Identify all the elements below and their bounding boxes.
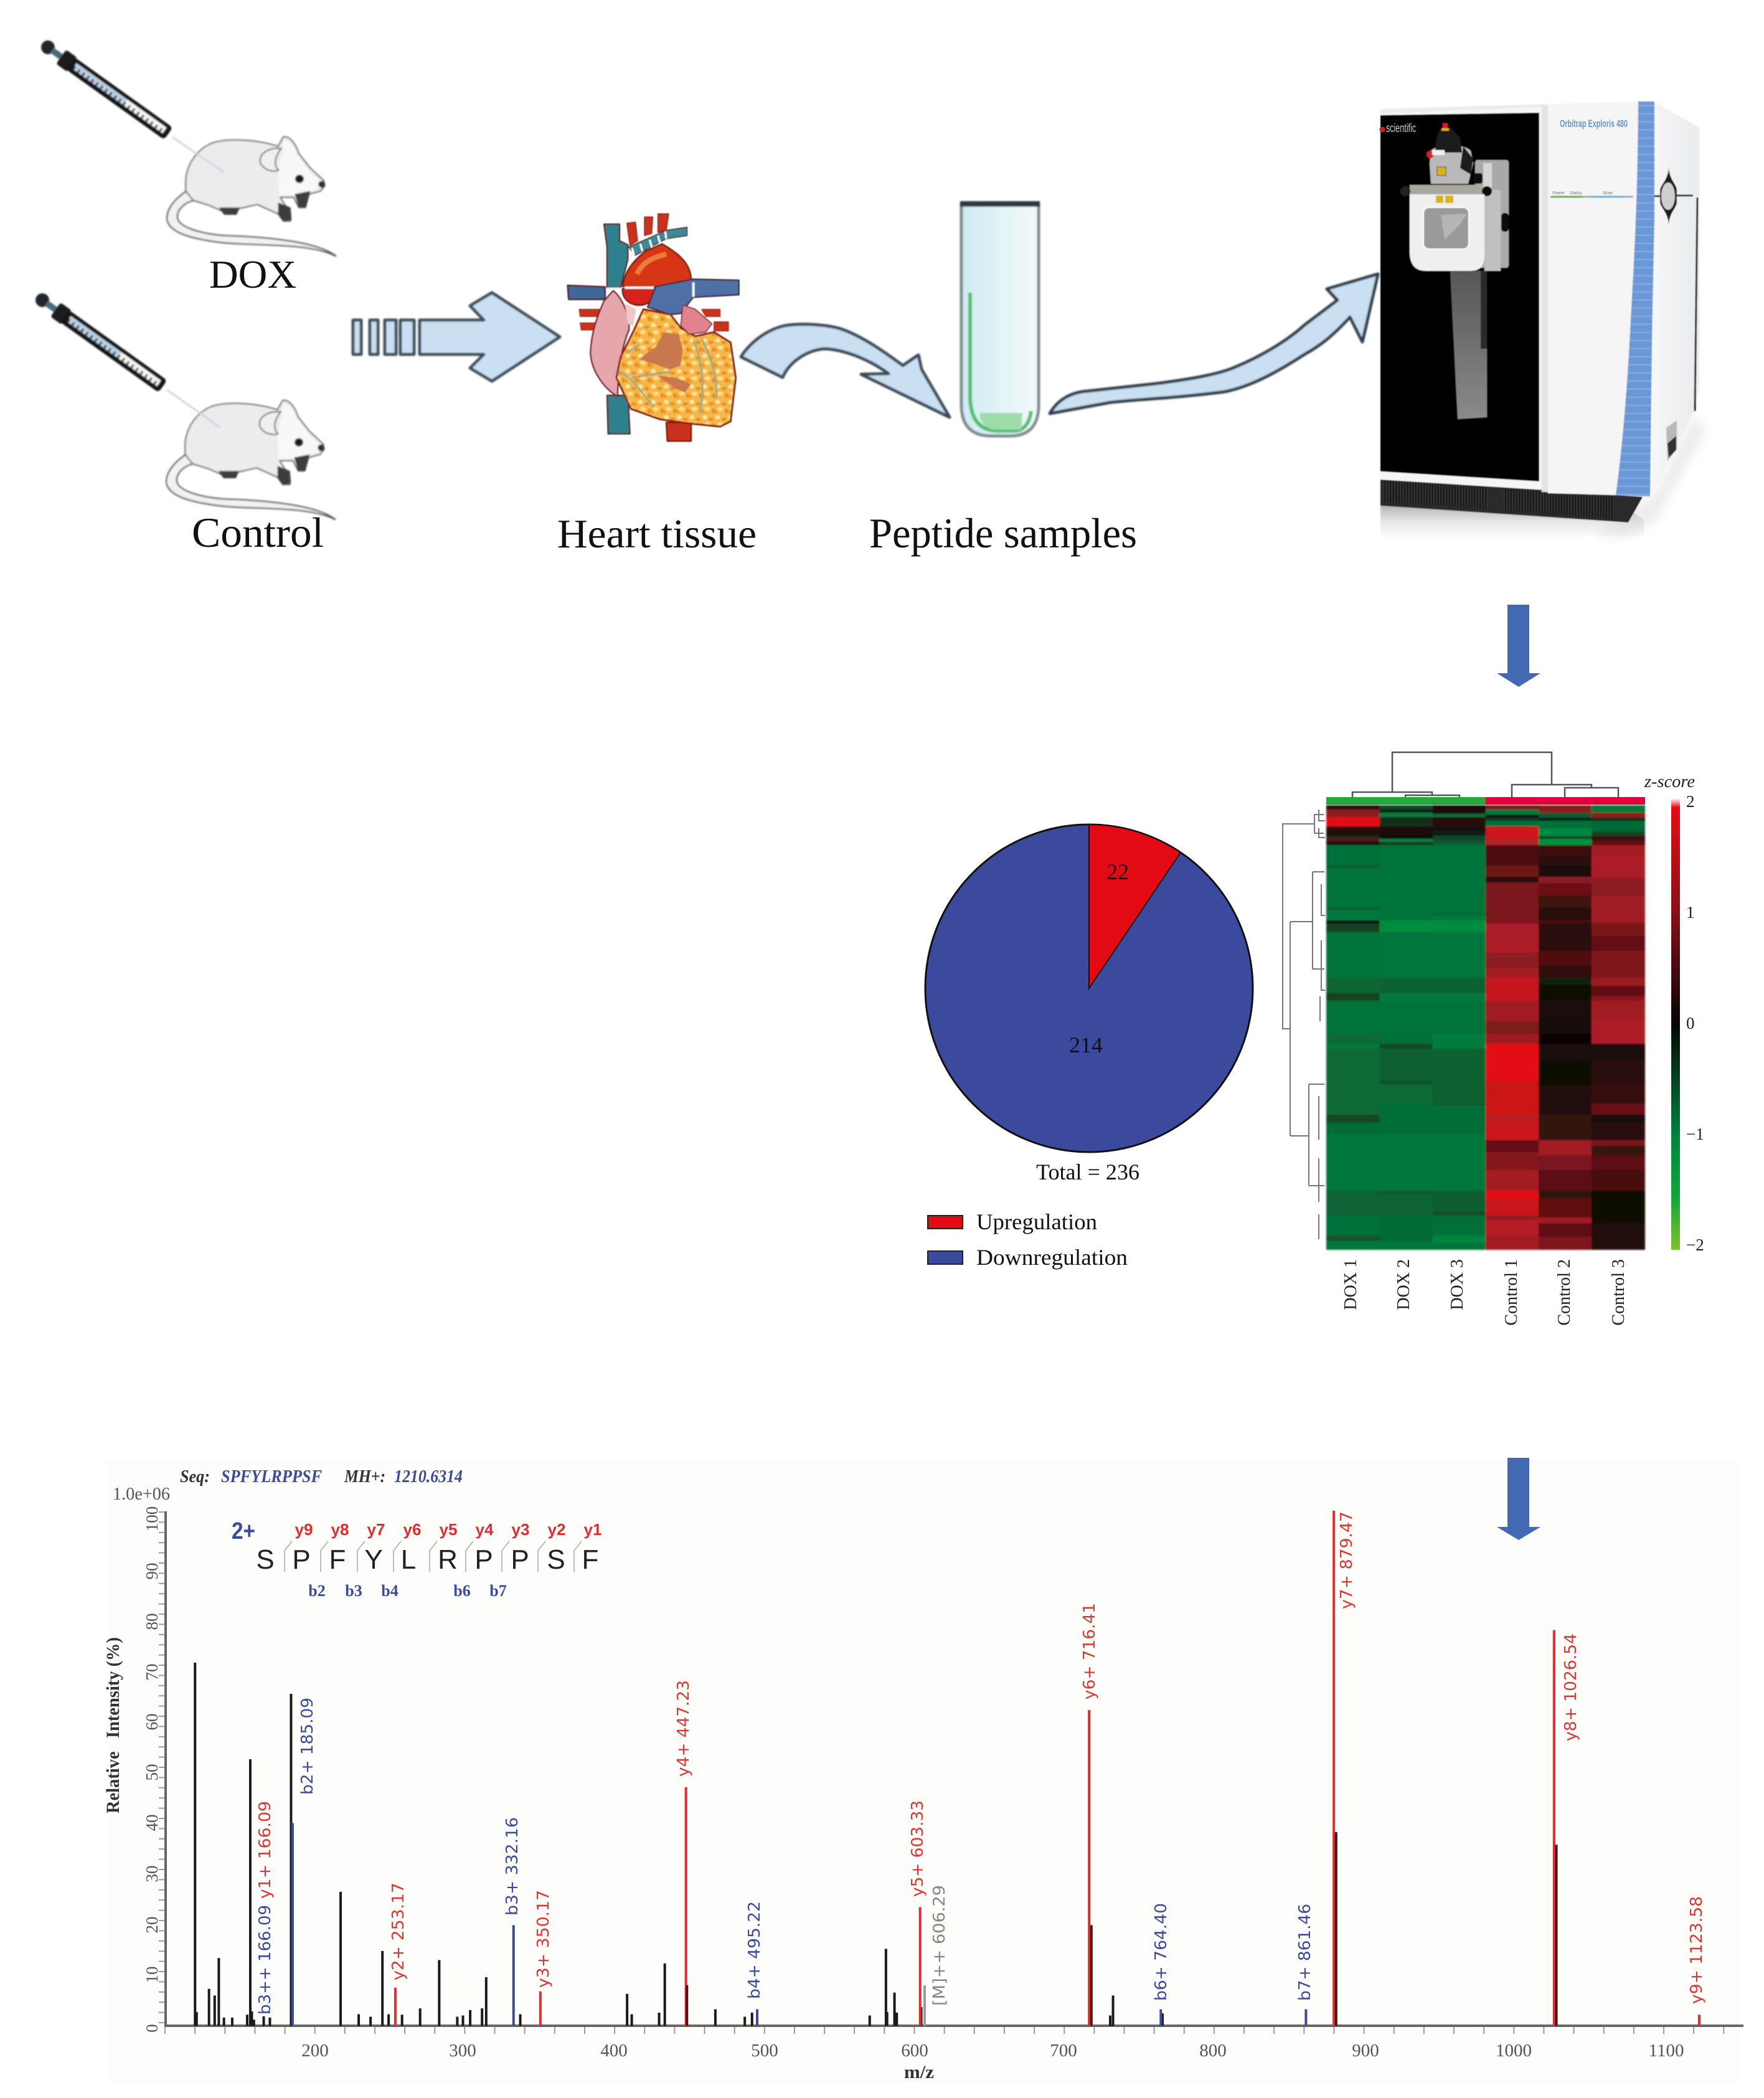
panel: peptide fragment map: R (438, 1544, 458, 1575)
label: DOX: DOX (209, 252, 296, 296)
panel: peptide fragment map: F (582, 1544, 598, 1575)
label: x axis tick values: 800 (1199, 2041, 1227, 2061)
label: b-ion peak annotations: b7+ 861.46 (1296, 1904, 1314, 2001)
label: y axis tick values: 20 (143, 1917, 161, 1933)
label: total: Total = 236 (1036, 1160, 1139, 1184)
arrow: heart to peptide (741, 324, 950, 417)
label: colour bar values: 1 (1686, 903, 1695, 922)
label: x axis tick values: 500 (751, 2041, 778, 2061)
label: x axis tick values: 400 (600, 2041, 628, 2061)
chart: top dendrogram (1352, 752, 1618, 797)
illustration: Orbitrap mass spectrometer: Power (1552, 191, 1565, 196)
chart: red y-ion peaks (395, 1511, 1699, 2026)
label: heatmap sample names: Control 1 (1502, 1259, 1521, 1326)
chart: blue b-ion peaks (293, 1823, 1306, 2026)
chart: heatmap (1326, 805, 1645, 1250)
label: Control: Control (192, 509, 324, 556)
panel: peptide fragment map: P (292, 1544, 311, 1575)
panel: peptide fragment map: L (401, 1544, 416, 1575)
label: sequence header (180, 1467, 463, 1486)
label: heatmap sample names: DOX 2 (1394, 1259, 1413, 1310)
arrow: peptide to mass spectrometer (1050, 274, 1378, 413)
label: x axis title: m/z (904, 2062, 934, 2082)
label: y axis tick values: 40 (143, 1815, 161, 1831)
chart: black unassigned peaks (195, 1663, 870, 2026)
panel: peptide fragment map: y5 (440, 1520, 457, 1539)
illustration: Orbitrap mass spectrometer: Scan (1603, 191, 1613, 196)
panel: peptide fragment map: b2 (308, 1582, 326, 1600)
label: x axis tick values: 600 (901, 2041, 928, 2061)
chart: pie of regulated proteins: 214 (1069, 1032, 1103, 1057)
chart: black unassigned peaks, high mass (886, 1949, 1163, 2026)
label: colour bar values: −2 (1686, 1236, 1704, 1254)
label: x axis tick values: 1000 (1496, 2041, 1532, 2061)
panel: peptide fragment map: b6 (453, 1582, 471, 1600)
panel: peptide fragment map: y3 (512, 1520, 529, 1539)
label: Heart tissue: Heart tissue (557, 511, 757, 557)
legend: upregulation: Upregulation (976, 1209, 1097, 1234)
illustration: Orbitrap mass spectrometer: scientific (1386, 122, 1416, 135)
label: precursor annotation: [M]++ 606.29 (930, 1885, 949, 2006)
label: y-ion peak annotations: y1+ 166.09 (256, 1801, 275, 1899)
label: y axis tick values: 90 (143, 1563, 161, 1579)
arrow: mass spectrometer to results (1497, 605, 1540, 687)
icon: DOX syringe (37, 36, 224, 172)
label: y axis tick values: 30 (143, 1866, 161, 1882)
label: b-ion peak annotations: b3+ 332.16 (503, 1817, 522, 1916)
illustration: heart (568, 214, 739, 441)
panel: peptide fragment map: b7 (489, 1582, 507, 1600)
label: y-ion peak annotations: y7+ 879.47 (1337, 1511, 1356, 1609)
label: x axis tick values: 700 (1050, 2041, 1077, 2061)
label: y-ion peak annotations: y3+ 350.17 (534, 1890, 553, 1988)
illustration: Control mouse (166, 400, 336, 520)
arrow: mice to heart (353, 293, 560, 381)
chart: pie of regulated proteins: 22 (1106, 859, 1129, 884)
label: y-ion peak annotations (256, 1511, 1706, 2004)
panel: peptide fragment map: y8 (331, 1520, 349, 1539)
label: colour bar values: 0 (1686, 1014, 1695, 1032)
illustration: Orbitrap mass spectrometer (1380, 102, 1706, 537)
chart: left dendrogram (1283, 810, 1325, 1239)
label: x axis tick values: 200 (301, 2041, 329, 2061)
label: Peptide samples: Peptide samples (869, 509, 1137, 557)
label: colour bar values: −1 (1686, 1125, 1704, 1143)
icon: Control syringe (32, 289, 220, 427)
label: heatmap sample names: DOX 3 (1448, 1259, 1467, 1310)
panel: peptide fragment map: y2 (548, 1520, 565, 1539)
label: y-ion peak annotations: y6+ 716.41 (1080, 1603, 1099, 1699)
panel: peptide fragment map: P (474, 1544, 493, 1575)
label: y axis tick values: 10 (143, 1967, 161, 1983)
label: z-score title: z-score (1644, 772, 1695, 791)
label: b-ion peak annotations: b6+ 764.40 (1152, 1903, 1171, 2001)
label: heatmap sample names: DOX 1 (1341, 1259, 1361, 1310)
panel: peptide fragment map: b4 (381, 1582, 399, 1600)
illustration: Orbitrap mass spectrometer: Status (1570, 191, 1582, 196)
label: sequence header: MH+: (344, 1467, 385, 1486)
illustration: Orbitrap mass spectrometer: Orbitrap Exploris 480 (1560, 118, 1628, 130)
panel: MS/MS spectrum (103, 1460, 1746, 2083)
chart: z-score colour bar (1671, 798, 1680, 1250)
chart: sample annotation bar (1326, 797, 1645, 805)
label: y-ion peak annotations: y4+ 447.23 (674, 1680, 693, 1777)
label: heatmap sample names: Control 2 (1555, 1259, 1574, 1326)
panel: peptide fragment map: S (256, 1544, 275, 1575)
label: x axis tick values (301, 2041, 1684, 2061)
label: colour bar values: 2 (1686, 792, 1695, 811)
label: intensity scale: 1.0e+06 (113, 1485, 170, 1504)
panel: peptide fragment map: y7 (367, 1520, 385, 1539)
label: b-ion peak annotations (256, 1698, 1314, 2015)
label: y-ion peak annotations: y8+ 1026.54 (1562, 1633, 1580, 1741)
label: y-ion peak annotations: y2+ 253.17 (389, 1883, 408, 1980)
label: b-ion peak annotations: b3++ 166.09 (256, 1905, 275, 2015)
label: x axis tick values: 900 (1352, 2041, 1379, 2061)
panel: peptide fragment map: b3 (345, 1582, 362, 1600)
panel: peptide fragment map: P (511, 1544, 529, 1575)
label: y axis tick values: 50 (143, 1764, 161, 1781)
label: sequence header: Seq: (180, 1467, 210, 1486)
chart: spectrum axes (159, 1511, 1746, 2034)
illustration: test tube (960, 201, 1040, 436)
legend: upregulation (928, 1209, 1097, 1234)
label: y axis tick values: 80 (143, 1613, 161, 1630)
arrow: results to spectrum (1497, 1458, 1540, 1540)
panel: peptide fragment map: Y (364, 1544, 383, 1575)
panel: peptide fragment map: 2+ (232, 1518, 255, 1544)
label: x axis tick values: 1100 (1649, 2041, 1684, 2061)
label: sequence header: 1210.6314 (394, 1467, 463, 1486)
label: y axis tick values: 0 (143, 2024, 161, 2033)
panel: peptide fragment map: y9 (295, 1520, 313, 1539)
label: y-ion peak annotations: y5+ 603.33 (908, 1800, 927, 1897)
panel: peptide fragment map: y1 (584, 1520, 601, 1539)
illustration: DOX mouse (167, 137, 336, 257)
label: y axis tick values: 70 (143, 1664, 161, 1680)
label: y-ion peak annotations: y9+ 1123.58 (1687, 1896, 1706, 2004)
label: x axis tick values: 300 (449, 2041, 476, 2061)
legend: downregulation: Downregulation (976, 1245, 1128, 1270)
label: y axis tick values (143, 1506, 161, 2033)
label: y axis tick values: 100 (143, 1506, 161, 1531)
panel: peptide fragment map: F (329, 1544, 346, 1575)
panel: peptide fragment map: S (547, 1544, 565, 1575)
label: heatmap sample names: Control 3 (1609, 1259, 1628, 1326)
label: sequence header: SPFYLRPPSF (221, 1467, 322, 1486)
label: y axis tick values: 60 (143, 1714, 161, 1730)
chart: dark shoulder peaks (687, 1832, 1557, 2026)
chart: pie of regulated proteins (925, 825, 1253, 1152)
label: b-ion peak annotations: b4+ 495.22 (745, 1901, 764, 1999)
label: colour bar values (1686, 792, 1704, 1254)
label: b-ion peak annotations: b2+ 185.09 (298, 1698, 317, 1795)
label: heatmap sample names (1341, 1259, 1628, 1326)
panel: peptide fragment map (232, 1518, 601, 1600)
panel: peptide fragment map: y4 (476, 1520, 494, 1539)
label: y axis title: Relative Intensity (%) (103, 1637, 123, 1813)
panel: peptide fragment map: y6 (403, 1520, 421, 1539)
